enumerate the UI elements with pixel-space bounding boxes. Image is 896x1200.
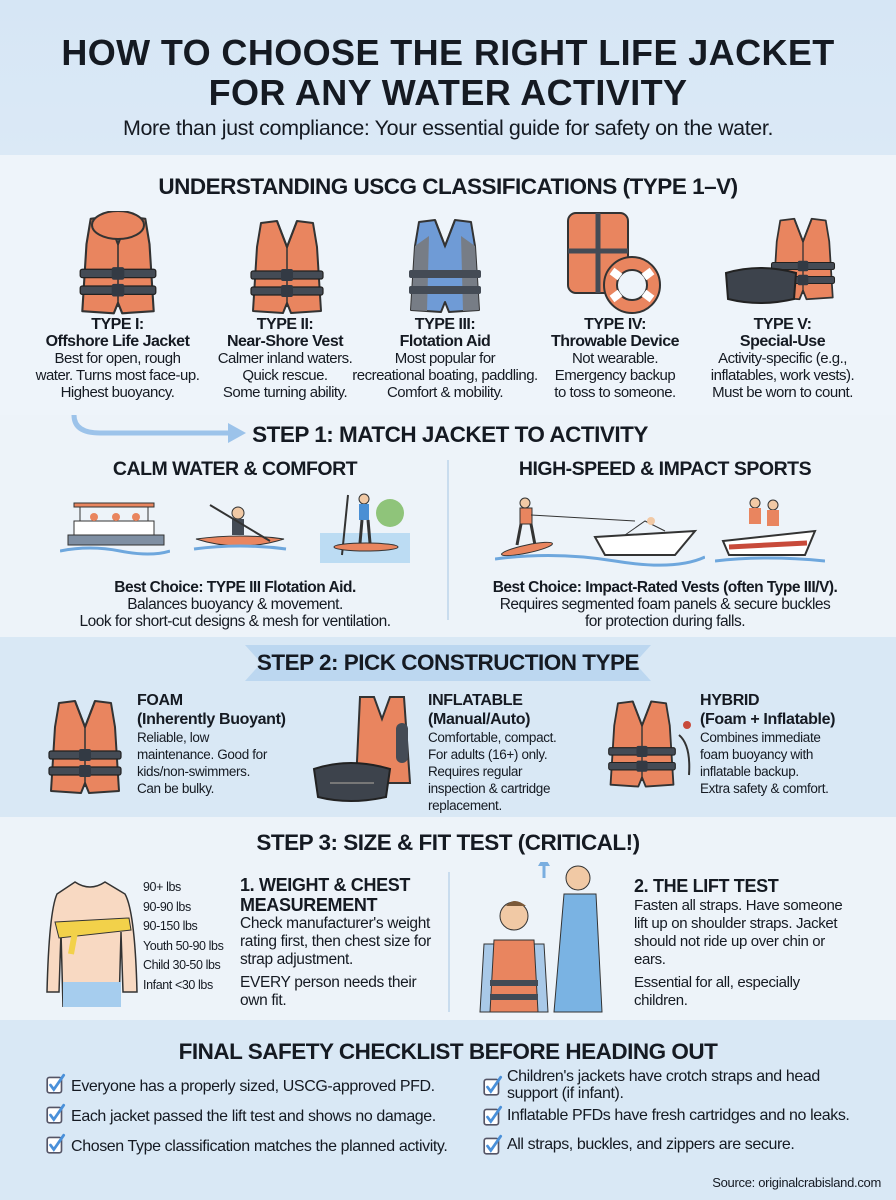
panel: checklist bbox=[0, 1020, 896, 1200]
high-speed: Best Choice: Impact-Rated Vests (often Type III/V). bbox=[493, 579, 837, 596]
panel: step 2 bbox=[0, 637, 896, 817]
checklist right: All straps, buckles, and zippers are secure. bbox=[507, 1136, 794, 1153]
hybrid: Extra safety & comfort. bbox=[700, 781, 828, 796]
icon: jet ski bbox=[715, 498, 825, 562]
type V: inflatables, work vests). bbox=[711, 367, 854, 384]
high-speed: Requires segmented foam panels & secure buckles bbox=[500, 596, 830, 613]
lift test text: children. bbox=[634, 992, 688, 1009]
type III: TYPE III: bbox=[415, 316, 475, 333]
type I bbox=[36, 211, 199, 401]
type V: TYPE V: bbox=[754, 316, 811, 333]
lift test text: lift up on shoulder straps. Jacket bbox=[634, 915, 837, 932]
calm water: CALM WATER & COMFORT bbox=[113, 458, 357, 480]
type V bbox=[711, 218, 854, 401]
type IV: to toss to someone. bbox=[554, 384, 676, 401]
weight & chest text: MEASUREMENT bbox=[240, 895, 377, 915]
type I: Highest buoyancy. bbox=[61, 384, 174, 401]
inflatable: replacement. bbox=[428, 798, 502, 813]
weight & chest text bbox=[240, 875, 432, 1009]
icon: wakeboarder and boat bbox=[495, 498, 705, 567]
source: Source: originalcrabisland.com bbox=[712, 1175, 881, 1190]
checklist left: Everyone has a properly sized, USCG-approved PFD. bbox=[71, 1078, 435, 1095]
weight & chest text: EVERY person needs their bbox=[240, 974, 416, 991]
hybrid bbox=[608, 692, 835, 796]
type II bbox=[218, 220, 352, 401]
high-speed: for protection during falls. bbox=[585, 613, 745, 630]
step 1 heading: STEP 1: MATCH JACKET TO ACTIVITY bbox=[252, 422, 648, 447]
weight & chest text: rating first, then chest size for bbox=[240, 933, 431, 950]
foam: kids/non-swimmers. bbox=[137, 764, 250, 779]
title bbox=[61, 32, 835, 113]
type II: Some turning ability. bbox=[223, 384, 347, 401]
type IV: Not wearable. bbox=[572, 350, 658, 367]
calm water: Look for short-cut designs & mesh for ventilation. bbox=[80, 613, 390, 630]
foam: maintenance. Good for bbox=[137, 747, 267, 762]
calm water: Balances buoyancy & movement. bbox=[127, 596, 343, 613]
heading: UNDERSTANDING USCG CLASSIFICATIONS (TYPE 1–V) bbox=[158, 174, 738, 199]
weight & chest text: 1. WEIGHT & CHEST bbox=[240, 875, 410, 895]
chest diagram: Child 30-50 lbs bbox=[143, 958, 220, 972]
type IV: Throwable Device bbox=[551, 333, 679, 350]
chest diagram: 90-90 lbs bbox=[143, 900, 191, 914]
hybrid: Combines immediate bbox=[700, 730, 820, 745]
foam: FOAM bbox=[137, 692, 183, 709]
lift test text: Fasten all straps. Have someone bbox=[634, 897, 842, 914]
checklist heading: FINAL SAFETY CHECKLIST BEFORE HEADING OUT bbox=[179, 1039, 717, 1064]
lift test illustration bbox=[480, 862, 602, 1012]
type V: Activity-specific (e.g., bbox=[718, 350, 847, 367]
calm water: Best Choice: TYPE III Flotation Aid. bbox=[114, 579, 356, 596]
divider bbox=[447, 460, 449, 620]
lift test text: ears. bbox=[634, 951, 666, 968]
type IV: TYPE IV: bbox=[584, 316, 646, 333]
type III: Most popular for bbox=[395, 350, 495, 367]
foam bbox=[48, 692, 286, 796]
lift test text: should not ride up over chin or bbox=[634, 933, 825, 950]
type III: Flotation Aid bbox=[400, 333, 490, 350]
type I: Best for open, rough bbox=[55, 350, 180, 367]
type I: water. Turns most face-up. bbox=[36, 367, 199, 384]
lift test text bbox=[634, 876, 842, 1009]
chest diagram: Youth 50-90 lbs bbox=[143, 938, 223, 952]
type II: TYPE II: bbox=[257, 316, 313, 333]
foam: Can be bulky. bbox=[137, 781, 214, 796]
inflatable: INFLATABLE bbox=[428, 692, 523, 709]
type V: Must be worn to count. bbox=[712, 384, 853, 401]
type III: Comfort & mobility. bbox=[387, 384, 503, 401]
icon: pontoon boat bbox=[60, 502, 170, 556]
type II: Near-Shore Vest bbox=[227, 333, 343, 350]
subtitle: More than just compliance: Your essential guide for safety on the water. bbox=[123, 116, 773, 140]
header band bbox=[0, 0, 896, 155]
type I: Offshore Life Jacket bbox=[46, 333, 189, 350]
inflatable bbox=[312, 692, 556, 813]
hybrid: HYBRID bbox=[700, 692, 759, 709]
arrow bbox=[72, 415, 246, 443]
high-speed: HIGH-SPEED & IMPACT SPORTS bbox=[519, 458, 811, 480]
type II: Calmer inland waters. bbox=[218, 350, 352, 367]
type III: recreational boating, paddling. bbox=[352, 367, 538, 384]
checklist right: Children's jackets have crotch straps and head bbox=[507, 1068, 820, 1085]
step 2 banner bbox=[245, 645, 651, 681]
type IV bbox=[551, 212, 679, 401]
hybrid: inflatable backup. bbox=[700, 764, 799, 779]
inflatable: For adults (16+) only. bbox=[428, 747, 547, 762]
weight & chest text: own fit. bbox=[240, 992, 286, 1009]
inflatable: Requires regular bbox=[428, 764, 522, 779]
calm water bbox=[60, 458, 410, 630]
checklist left: Chosen Type classification matches the planned activity. bbox=[71, 1138, 447, 1155]
icon: kayak bbox=[194, 504, 286, 550]
hybrid: (Foam + Inflatable) bbox=[700, 711, 835, 728]
icon: paddle board bbox=[320, 494, 410, 563]
chest diagram: Infant <30 lbs bbox=[143, 978, 213, 992]
title: HOW TO CHOOSE THE RIGHT LIFE JACKET bbox=[61, 32, 835, 73]
checklist right: support (if infant). bbox=[507, 1085, 624, 1102]
type III bbox=[352, 219, 538, 401]
checklist left: Each jacket passed the lift test and shows no damage. bbox=[71, 1108, 436, 1125]
lift test text: 2. THE LIFT TEST bbox=[634, 876, 778, 896]
panel: USCG classifications bbox=[0, 155, 896, 415]
title: FOR ANY WATER ACTIVITY bbox=[209, 72, 687, 113]
foam: Reliable, low bbox=[137, 730, 209, 745]
checklist right bbox=[483, 1068, 849, 1155]
chest diagram bbox=[46, 880, 224, 1007]
foam: (Inherently Buoyant) bbox=[137, 711, 286, 728]
lift test text: Essential for all, especially bbox=[634, 974, 800, 991]
panel: step 3 bbox=[0, 817, 896, 1020]
panel: step 1 bbox=[0, 415, 896, 637]
weight & chest text: strap adjustment. bbox=[240, 951, 353, 968]
weight & chest text: Check manufacturer's weight bbox=[240, 915, 430, 932]
hybrid: foam buoyancy with bbox=[700, 747, 813, 762]
inflatable: Comfortable, compact. bbox=[428, 730, 556, 745]
divider bbox=[448, 872, 450, 1012]
high-speed bbox=[493, 458, 837, 630]
checklist left bbox=[46, 1074, 447, 1155]
type IV: Emergency backup bbox=[555, 367, 675, 384]
chest diagram: 90+ lbs bbox=[143, 880, 181, 894]
type II: Quick rescue. bbox=[242, 367, 328, 384]
checklist right: Inflatable PFDs have fresh cartridges and no leaks. bbox=[507, 1107, 849, 1124]
chest diagram: 90-150 lbs bbox=[143, 919, 197, 933]
step 3 heading: STEP 3: SIZE & FIT TEST (CRITICAL!) bbox=[256, 830, 640, 855]
inflatable: (Manual/Auto) bbox=[428, 711, 530, 728]
type V: Special-Use bbox=[740, 333, 825, 350]
inflatable: inspection & cartridge bbox=[428, 781, 550, 796]
panel: step 2: STEP 2: PICK CONSTRUCTION TYPE bbox=[257, 650, 639, 675]
type I: TYPE I: bbox=[91, 316, 144, 333]
